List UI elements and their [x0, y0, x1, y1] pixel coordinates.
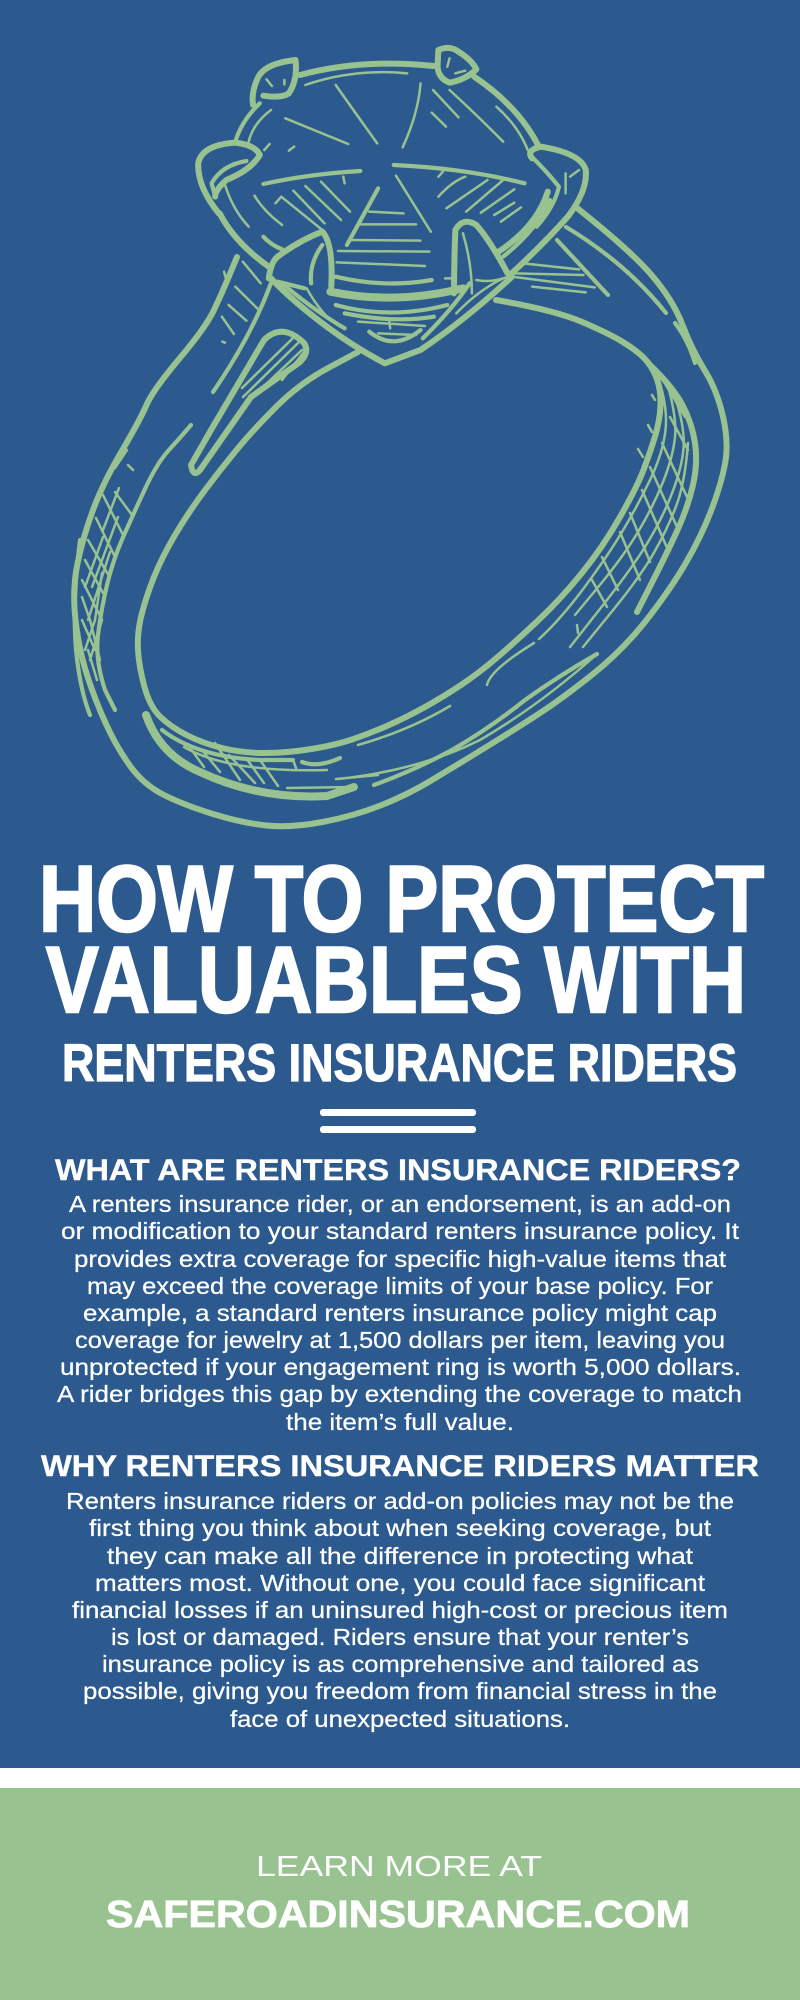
body text: unprotected if your engagement ring is worth 5,000 dollars. [60, 1354, 741, 1380]
footer panel [0, 1788, 800, 2000]
left band second line [75, 425, 191, 715]
call to action: LEARN MORE AT [256, 1851, 542, 1883]
body text: example, a standard renters insurance policy might cap [83, 1300, 717, 1326]
body text: A renters insurance rider, or an endorsement, is an add-on [69, 1191, 731, 1217]
body text: matters most. Without one, you could face significant [95, 1570, 706, 1596]
body text: provides extra coverage for specific high-value items that [74, 1246, 727, 1272]
ring band [74, 208, 727, 826]
teardrop facet [191, 332, 306, 473]
section: what are riders [55, 1154, 742, 1435]
body text: A rider bridges this gap by extending the coverage to match [57, 1381, 742, 1407]
body text: or modification to your standard renters insurance policy. It [61, 1218, 740, 1244]
body text: coverage for jewelry at 1,500 dollars per item, leaving you [75, 1327, 725, 1353]
website url: SAFEROADINSURANCE.COM [106, 1894, 690, 1936]
title [39, 846, 764, 1093]
body text: possible, giving you freedom from financial stress in the [83, 1678, 717, 1704]
body text: they can make all the difference in protecting what [107, 1543, 694, 1569]
heading: WHY RENTERS INSURANCE RIDERS MATTER [41, 1450, 759, 1483]
heading: WHAT ARE RENTERS INSURANCE RIDERS? [55, 1154, 741, 1187]
body text: face of unexpected situations. [230, 1706, 570, 1732]
body text: the item’s full value. [286, 1409, 514, 1435]
section: why riders matter [41, 1450, 759, 1732]
shoulder lines [213, 227, 695, 392]
lower band strokes [374, 654, 597, 785]
body text [66, 1488, 734, 1732]
body text: financial losses if an uninsured high-cost or precious item [72, 1597, 728, 1623]
left band hatching [82, 450, 133, 680]
body text [57, 1191, 742, 1435]
right band hatching [637, 365, 696, 612]
body text: insurance policy is as comprehensive and tailored as [102, 1651, 699, 1677]
body text: may exceed the coverage limits of your base policy. For [87, 1273, 713, 1299]
band outer edge [74, 208, 727, 826]
band inner edge [138, 300, 661, 753]
ring head: gem and prongs [198, 48, 595, 363]
white separator band [0, 1768, 800, 1788]
bottom band hatching [184, 743, 354, 788]
body text: first thing you think about when seeking coverage, but [89, 1515, 712, 1541]
body text: Renters insurance riders or add-on policies may not be the [66, 1488, 734, 1514]
body text: is lost or damaged. Riders ensure that your renter’s [111, 1624, 689, 1650]
icon: diamond engagement ring [74, 48, 727, 826]
divider [320, 1109, 476, 1133]
